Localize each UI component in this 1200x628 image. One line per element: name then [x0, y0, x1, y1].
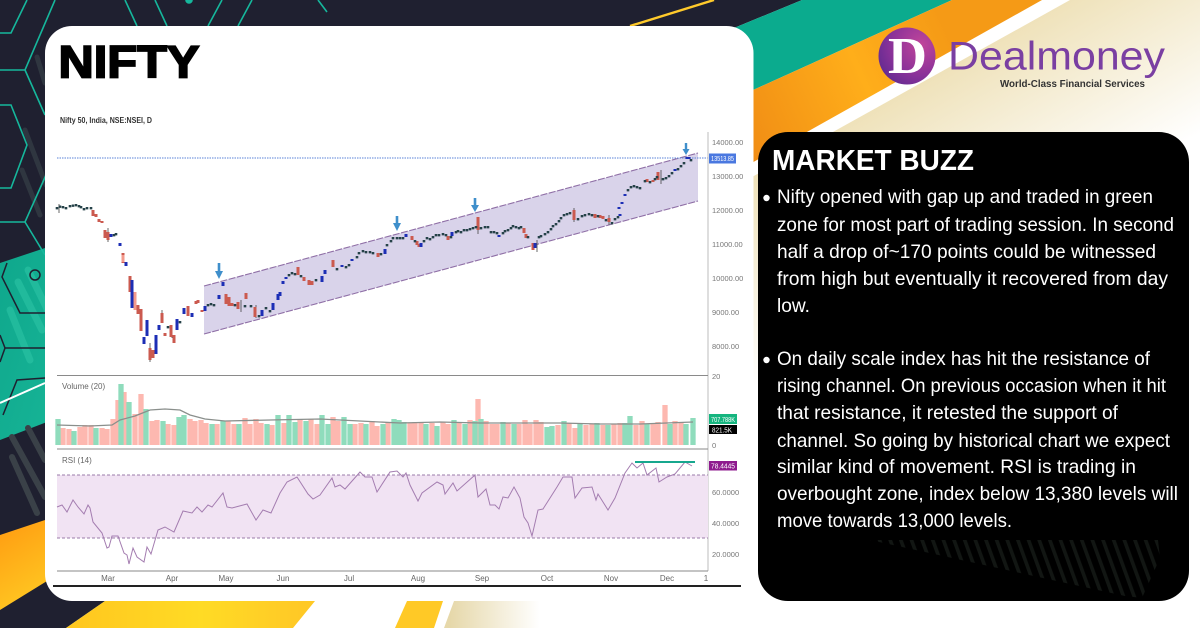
RSI value label: 78.4445 — [711, 464, 735, 470]
time axis: Oct — [541, 574, 554, 583]
volume value labels: 821.5K — [712, 428, 732, 434]
tagline: World-Class Financial Services — [1000, 78, 1145, 90]
volume moving average — [57, 409, 693, 426]
panel dividers — [57, 376, 708, 571]
price label: 13513.85 — [711, 156, 734, 163]
time axis: Aug — [411, 574, 425, 583]
arrow: July resistance touch — [393, 216, 401, 231]
heading: NIFTY: NIFTY — [58, 36, 200, 88]
label: volume: Volume (20) — [62, 382, 105, 391]
price axis: 10000.00 — [712, 274, 743, 283]
brand name: Dealmoney — [948, 34, 1165, 78]
chart title: Nifty 50, India, NSE:NSEI, D — [60, 116, 152, 125]
text block: first bullet: zone for most part of trading session. In second — [777, 214, 1174, 236]
time axis: May — [218, 574, 234, 583]
RSI value label — [709, 461, 737, 470]
chart bottom rule — [53, 585, 741, 587]
arrows — [215, 143, 690, 279]
panel: market buzz — [758, 132, 1189, 601]
price axis: 12000.00 — [712, 206, 743, 215]
price axis — [708, 132, 743, 571]
icon: D badge — [878, 28, 936, 85]
text block: first bullet: from high but eventually it recovered from day — [777, 268, 1168, 290]
price axis: 8000.00 — [712, 342, 739, 351]
rising channel — [204, 153, 698, 334]
heading: market buzz: MARKET BUZZ — [772, 145, 974, 177]
price axis: 20 — [712, 372, 720, 381]
text block: second bullet: rising channel. On previous occasion when it hit — [777, 375, 1167, 397]
panel: chart card — [45, 26, 754, 601]
chart: RSI panel — [57, 456, 737, 564]
arrow: May resistance touch — [215, 263, 223, 279]
price axis: 20.0000 — [712, 550, 739, 559]
time axis: Dec — [660, 574, 674, 583]
price axis: 13000.00 — [712, 172, 743, 181]
time axis: Jul — [344, 574, 354, 583]
arrow: September resistance touch — [471, 198, 479, 212]
time axis — [101, 574, 709, 583]
text block: second bullet: move towards 13,000 levels. — [777, 510, 1012, 532]
text block: second bullet — [763, 348, 1178, 532]
volume bars — [58, 384, 693, 445]
text block: first bullet: Nifty opened with gap up and traded in green — [777, 186, 1153, 208]
price axis: 14000.00 — [712, 138, 743, 147]
time axis: Sep — [475, 574, 490, 583]
RSI band — [57, 475, 708, 538]
time axis: Apr — [166, 574, 179, 583]
text block: second bullet: channel. So going by historical chart we expect — [777, 430, 1171, 452]
time axis: Nov — [604, 574, 618, 583]
logo: Dealmoney — [878, 28, 1165, 90]
price axis: 60.0000 — [712, 488, 739, 497]
price label — [709, 154, 736, 164]
label: RSI: RSI (14) — [62, 456, 92, 465]
current price dotted line — [57, 157, 708, 159]
RSI resistance line — [635, 461, 695, 463]
time axis: 1 — [704, 574, 709, 583]
text block: second bullet: On daily scale index has hit the resistance of — [777, 348, 1151, 370]
price axis: 40.0000 — [712, 519, 739, 528]
RSI line — [57, 462, 692, 564]
price axis: 0 — [712, 441, 716, 450]
volume value labels — [709, 414, 737, 434]
candlesticks — [57, 157, 691, 362]
text block: first bullet: half a drop of~170 points could be witnessed — [777, 241, 1156, 263]
time axis: Jun — [277, 574, 289, 583]
price axis: 9000.00 — [712, 308, 739, 317]
arrow: December resistance touch — [682, 143, 690, 155]
chart: volume panel — [57, 382, 737, 445]
price axis: 11000.00 — [712, 240, 743, 249]
time axis: Mar — [101, 574, 115, 583]
text block: second bullet: overbought zone, index below 13,380 levels will — [777, 483, 1178, 505]
volume value labels: 707.788K — [711, 417, 735, 424]
text block: first bullet: low. — [777, 295, 810, 317]
chart: price panel with rising channel — [57, 143, 708, 362]
text block: second bullet: that resistance, it retested the support of — [777, 402, 1119, 424]
text block: second bullet: similar kind of movement. RSI is trading in — [777, 456, 1136, 478]
icon: D badge: D — [888, 28, 927, 85]
text block: first bullet — [763, 186, 1174, 317]
